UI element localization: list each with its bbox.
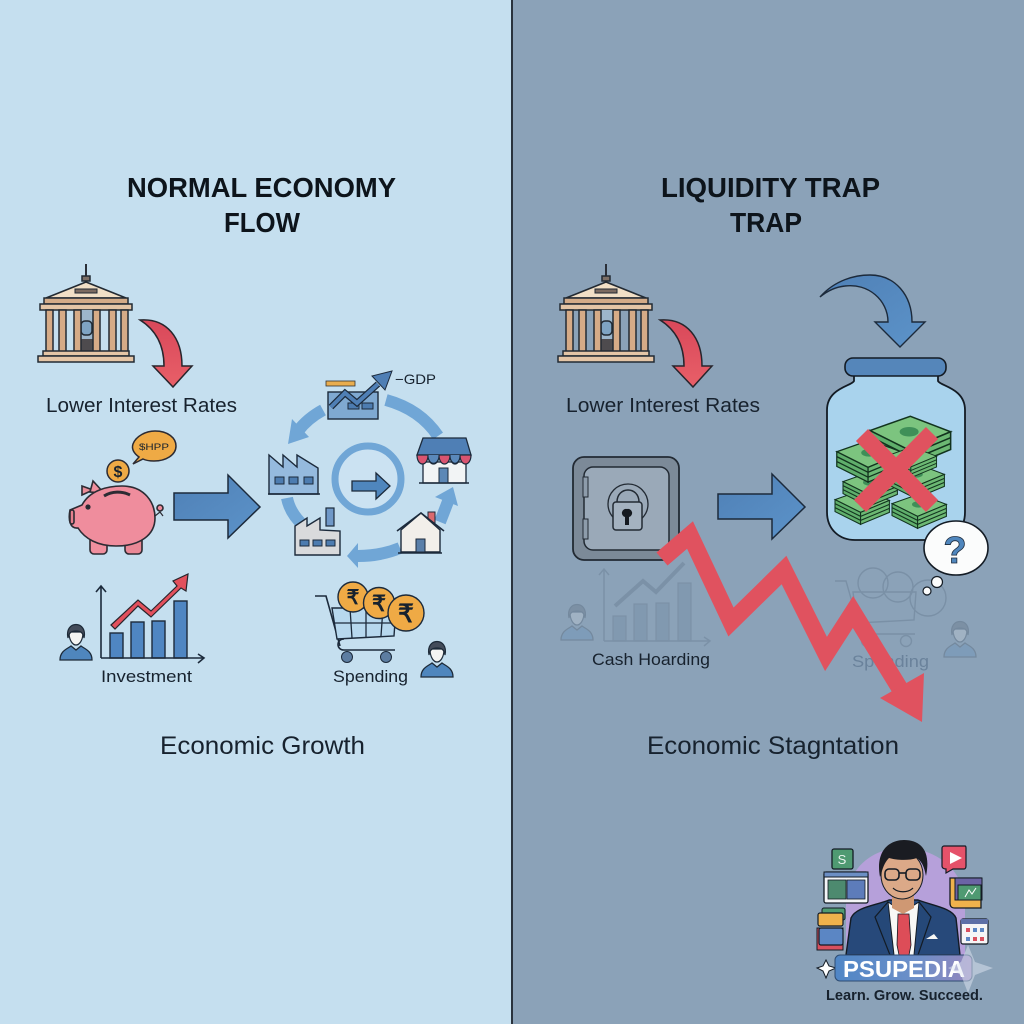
ring arrows xyxy=(287,400,450,556)
label: gdp: −GDP xyxy=(395,371,436,387)
brand name: PSUPEDIA xyxy=(843,956,965,982)
divider line xyxy=(511,0,513,1024)
icon: shopping cart with coins: ₹ xyxy=(347,587,360,609)
logo: psupedia xyxy=(817,840,993,1004)
icon: dollar coin xyxy=(107,460,129,482)
icon: investor xyxy=(60,624,92,660)
label: cash hoarding: Cash Hoarding xyxy=(592,650,710,669)
icon: green card xyxy=(832,849,853,869)
banner xyxy=(835,955,972,981)
icon: gdp factory with trend arrow xyxy=(326,371,392,419)
thought bubble with question mark xyxy=(923,521,988,595)
red trend arrow xyxy=(111,574,188,629)
thought bubble with question mark: ? xyxy=(943,530,967,572)
center arrow xyxy=(352,473,390,499)
icon: video bubble xyxy=(942,846,966,873)
arrow: red falling zigzag xyxy=(662,535,924,722)
icon: safe xyxy=(573,457,679,560)
center ring xyxy=(335,446,401,512)
heading: normal economy flow: NORMAL ECONOMY xyxy=(127,172,396,203)
icon: document folder xyxy=(950,878,982,908)
presenter portrait xyxy=(846,840,960,955)
speech bubble xyxy=(133,431,176,464)
icon: jar of cash xyxy=(827,358,965,540)
axes xyxy=(96,586,204,663)
icon: shopper xyxy=(421,642,453,677)
label: spending: Spending xyxy=(333,667,408,686)
label: investment: Investment xyxy=(101,667,192,686)
jar lid xyxy=(845,358,946,376)
icon: house xyxy=(397,512,444,553)
icon: central bank left xyxy=(38,264,134,362)
icon: calendar xyxy=(961,919,988,944)
purple halo xyxy=(846,848,965,955)
arrow: blue curved into jar xyxy=(820,275,925,347)
panel: liquidity trap background xyxy=(512,0,1024,1024)
icon: shopping cart with coins: ₹ xyxy=(398,600,414,628)
icon: green card: S xyxy=(838,852,847,867)
faded shopper xyxy=(944,622,976,657)
jar body xyxy=(827,375,965,540)
tagline: Learn. Grow. Succeed. xyxy=(826,987,983,1004)
red cross xyxy=(860,433,932,506)
icon: dollar coin: $ xyxy=(114,464,123,481)
faded chart xyxy=(599,563,710,646)
icon: shopping cart with coins: ₹ xyxy=(372,591,386,616)
label: faded spending: Spending xyxy=(852,652,929,671)
arrow: red curved down right xyxy=(660,320,712,387)
faded investor xyxy=(561,604,593,640)
heading: liquidity trap xyxy=(661,172,880,238)
heading: normal economy flow xyxy=(127,172,396,238)
cash stacks xyxy=(835,416,951,528)
icon: shopping cart with coins xyxy=(315,582,424,662)
icon: left factory xyxy=(268,455,320,494)
label: economic growth: Economic Growth xyxy=(160,732,365,760)
icon: storefront xyxy=(417,438,471,483)
icon: spreadsheet window xyxy=(824,872,868,903)
circular flow xyxy=(268,371,471,568)
translucent star xyxy=(948,945,993,993)
sparkle xyxy=(817,960,836,978)
chart: investment xyxy=(96,574,204,663)
icon: yellow folder xyxy=(818,908,845,926)
faded cart xyxy=(835,568,946,646)
label: lower interest rates right: Lower Interest Rates xyxy=(566,395,760,417)
arrow: red curved down left xyxy=(140,320,192,387)
arrow: blue block left xyxy=(174,475,260,538)
bars xyxy=(110,601,187,658)
heading: liquidity trap: LIQUIDITY TRAP xyxy=(661,172,880,203)
icon: lower factory xyxy=(295,508,340,555)
heading: liquidity trap: TRAP xyxy=(730,207,802,238)
heading: normal economy flow: FLOW xyxy=(224,207,301,238)
icon: central bank right xyxy=(558,264,654,362)
icon: books xyxy=(817,928,843,950)
label: lower interest rates left: Lower Interest Rates xyxy=(46,395,237,417)
icon: piggy bank xyxy=(69,481,163,554)
speech bubble: $HPP xyxy=(139,442,169,452)
panel: normal economy background xyxy=(0,0,512,1024)
label: economic stagnation: Economic Stagntation xyxy=(647,732,899,760)
arrow: blue block right xyxy=(718,474,805,539)
